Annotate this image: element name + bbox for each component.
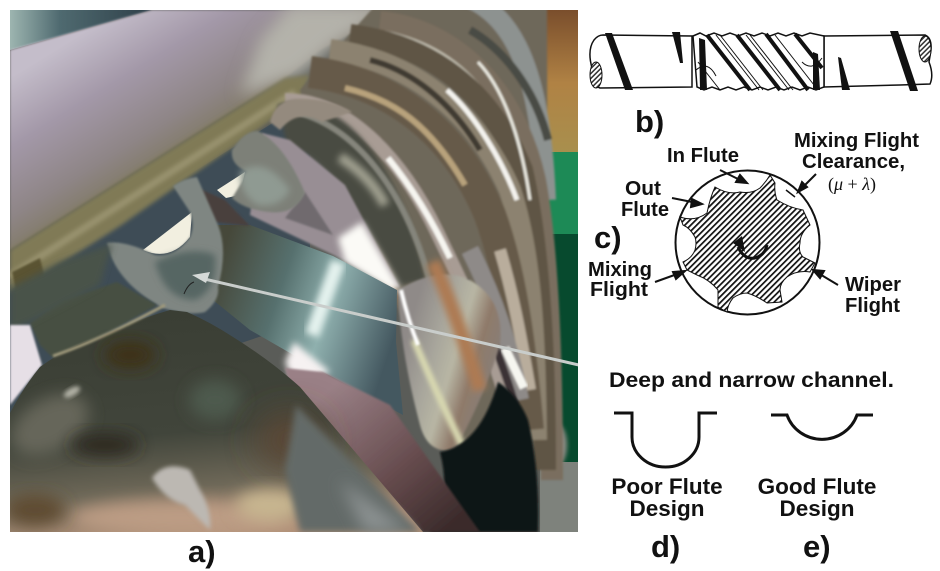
outermost silver shoulder [468,10,558,202]
callout arrows [655,170,838,285]
lug 3 rim [270,99,352,130]
label a): a) [188,534,216,569]
callout labels for cross-section: Flight [845,295,900,317]
brown wear mark between lugs [203,190,249,226]
label b): b) [635,104,664,139]
rotation arrow [738,245,767,258]
big front dome [10,310,423,532]
shaft outline [590,33,932,90]
callout labels for cross-section: In Flute [667,145,739,167]
black flights and wedges [605,31,918,91]
mixing section stripes [696,34,822,90]
label: good flute design: Good Flute [758,474,876,499]
white scuff on dome [152,466,210,530]
label c): c) [594,220,622,255]
label: good flute design: Design [779,496,855,521]
label: poor flute design: Design [629,496,705,521]
diagram d) poor flute profile [614,413,717,467]
grey pointer arrow [192,272,592,368]
channels and lands, rear to front [380,22,552,480]
callout labels for cross-section: Mixing Flight [794,130,919,152]
olive rail under pipe [10,75,310,292]
panel: a) photograph of mixing screw [1,0,592,536]
diagram e) good flute profile [771,415,873,439]
label d): d) [651,529,680,564]
label: poor flute design [611,474,723,521]
callout labels for cross-section [588,130,919,317]
white crescents behind lugs [143,212,192,254]
hatched shaft ends [590,62,602,88]
lug 2 bowl [232,131,305,212]
polished silver flute [398,274,501,451]
callout labels for cross-section: Flight [590,279,648,301]
heading: deep and narrow channel: Deep and narrow channel. [609,368,894,392]
grey side of dome [285,405,420,532]
front channel of flight [283,127,402,285]
left olive lug [30,282,157,358]
right background: orange, green and grey surroundings [540,10,578,532]
coil flights at rear [285,0,552,480]
outer barrel circle [676,170,820,314]
diagram c) screw cross-section [655,170,838,314]
callout labels for cross-section: Out [625,178,661,200]
callout labels for cross-section: Clearance, [802,151,905,173]
diagram b) screw section [590,31,932,91]
clearance formula: (μ + λ) [828,174,876,195]
label: good flute design [758,474,876,521]
callout labels for cross-section: Flute [621,199,669,221]
dark teal corner behind pipe [10,10,152,50]
slate gap below rail [10,100,310,420]
wing of flight between lugs [250,133,400,288]
dark underside of flight [430,382,538,532]
front land [285,100,510,410]
dark triangular notch [285,192,333,235]
callout labels for cross-section: Mixing [588,259,652,281]
label e): e) [803,529,831,564]
pink-brown band [285,368,480,532]
light pipe [10,10,395,250]
callout labels for cross-section: Wiper [845,274,901,296]
hatched core with flutes [680,175,815,312]
steel panel [205,225,403,415]
lug 1 bowl [107,177,223,313]
label: poor flute design: Poor Flute [611,474,723,499]
